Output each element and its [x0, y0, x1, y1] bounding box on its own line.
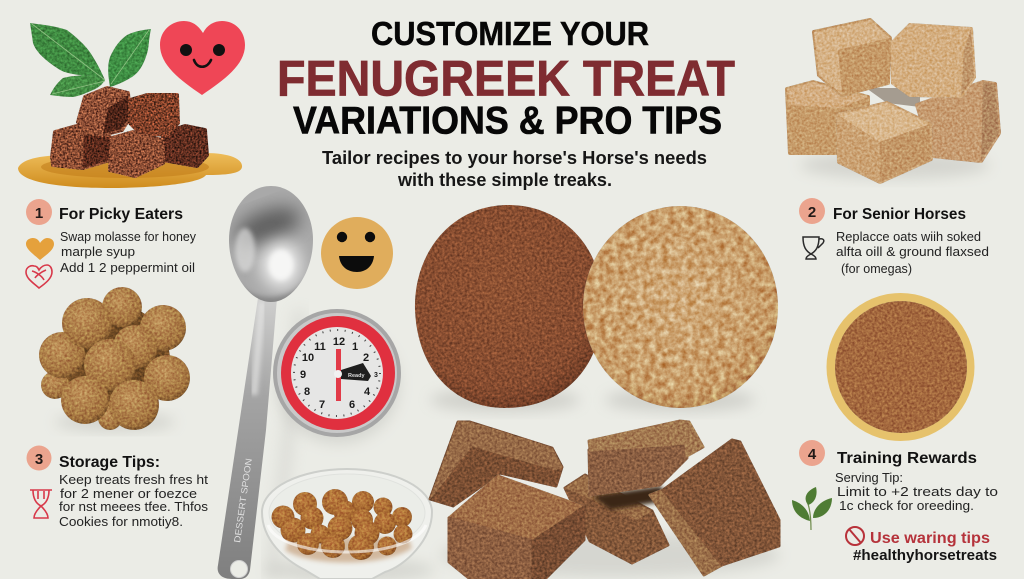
image: dark fenugreek cookie [415, 205, 603, 412]
spoon hole [230, 560, 248, 578]
clock numerals: 10 [302, 352, 314, 364]
fudge upper [589, 421, 703, 510]
number badge 1: 1 [35, 205, 43, 222]
number badge 3 [26, 446, 52, 470]
number badge 3: 3 [35, 451, 43, 468]
icon: orange heart [26, 238, 54, 260]
section 2: for senior horses [799, 198, 989, 276]
body text: marple syup [61, 244, 135, 259]
number badge 1 [26, 199, 52, 225]
fudge back middle [565, 475, 668, 563]
fudge back left [430, 422, 562, 506]
image: light oat cookie [583, 206, 778, 412]
spoon handle [218, 298, 277, 579]
clock numerals [300, 336, 378, 411]
bowl rim highlight [268, 525, 426, 552]
icon: red cup [30, 490, 52, 518]
body text: Swap molasse for honey [60, 229, 196, 244]
hashtag: #healthyhorsetreats [853, 547, 997, 564]
heading: For Senior Horses [833, 206, 966, 223]
mint leaves [30, 23, 151, 97]
number badge 2: 2 [808, 204, 816, 221]
icon: trophy [803, 237, 824, 259]
title line 2: FENUGREEK TREAT [277, 50, 735, 106]
clock hands [336, 349, 341, 401]
oat cube top left [814, 20, 890, 95]
heading: Training Rewards [837, 450, 977, 467]
section 3: storage tips [26, 446, 209, 529]
subtitle [322, 148, 707, 190]
image: glass bowl of pellets [262, 469, 435, 579]
clock numerals: 7 [319, 399, 325, 411]
body text: for nst meees tfee. Thfos [59, 499, 209, 514]
body text: Add 1 2 peppermint oil [60, 260, 195, 275]
warning text: Use waring tips [870, 530, 990, 547]
subtitle: Tailor recipes to your horse's Horse's needs [322, 148, 707, 168]
oat cube left back [787, 82, 868, 153]
warning icon [846, 527, 864, 545]
clock numerals: 8 [304, 386, 310, 398]
image: oat cubes top right [787, 20, 999, 182]
clock numerals: 3 [374, 372, 378, 379]
body text: Replacce oats wiih soked [836, 229, 981, 244]
icon: timer clock: Ready [348, 373, 365, 379]
body text: Cookies for nmotiy8. [59, 514, 183, 529]
body text [836, 229, 989, 276]
clock numerals: 6 [349, 399, 355, 411]
oat cube front [838, 103, 931, 182]
syrup pool [18, 153, 242, 188]
shadow gap between oat cubes [866, 88, 920, 107]
title line 1: CUSTOMIZE YOUR [371, 15, 649, 52]
body text: for 2 mener or foezce [60, 486, 197, 501]
number badge 4: 4 [808, 446, 817, 463]
body text [59, 472, 209, 529]
spoon engraving: DESSERT SPOON [232, 458, 254, 543]
number badge 4 [799, 440, 825, 466]
section 4: training rewards [792, 440, 998, 564]
body text: Serving Tip: [835, 470, 903, 485]
image: fudge cubes bottom center [430, 421, 780, 579]
image: oat balls cluster [39, 287, 190, 431]
fudge right [650, 440, 779, 575]
dark cubes [52, 88, 207, 176]
clock numerals: 1 [352, 341, 358, 353]
clock numerals: 11 [314, 341, 326, 353]
body text [60, 229, 196, 275]
heading: For Picky Eaters [59, 206, 183, 223]
image: bowl of ground fenugreek powder [826, 293, 974, 441]
body text: 1c check for oreeding. [839, 498, 974, 513]
oat cube right back [917, 82, 999, 161]
fudge front [449, 476, 584, 579]
icon: smiley face [321, 217, 393, 289]
number badge 2 [799, 198, 825, 224]
clock numerals: 4 [364, 386, 371, 398]
body text: Keep treats fresh fres ht [59, 472, 208, 487]
clock numerals: 9 [300, 369, 306, 381]
title line 3: VARIATIONS & PRO TIPS [293, 100, 722, 142]
body text: (for omegas) [841, 261, 912, 276]
heading: Storage Tips: [59, 454, 160, 471]
image: measuring spoon [218, 186, 313, 579]
body text [835, 470, 998, 513]
oat cube top right [893, 25, 974, 96]
icon: timer clock [273, 309, 401, 444]
icon: pink heart [26, 265, 52, 288]
pellets [272, 489, 412, 560]
title [277, 15, 735, 142]
subtitle: with these simple treaks. [397, 170, 612, 190]
section 1: for picky eaters [26, 199, 196, 288]
glass bowl [262, 469, 432, 579]
body text: Limit to +2 treats day to [837, 484, 998, 499]
clock numerals: 2 [363, 352, 369, 364]
icon: smiling heart [160, 21, 245, 95]
clock numerals: 12 [333, 336, 345, 348]
image: molasses cubes with mint and syrup [18, 23, 242, 188]
body text: alfta oill & ground flaxsed [836, 244, 989, 259]
spoon bowl [229, 186, 313, 310]
icon: green sprout [792, 487, 832, 530]
